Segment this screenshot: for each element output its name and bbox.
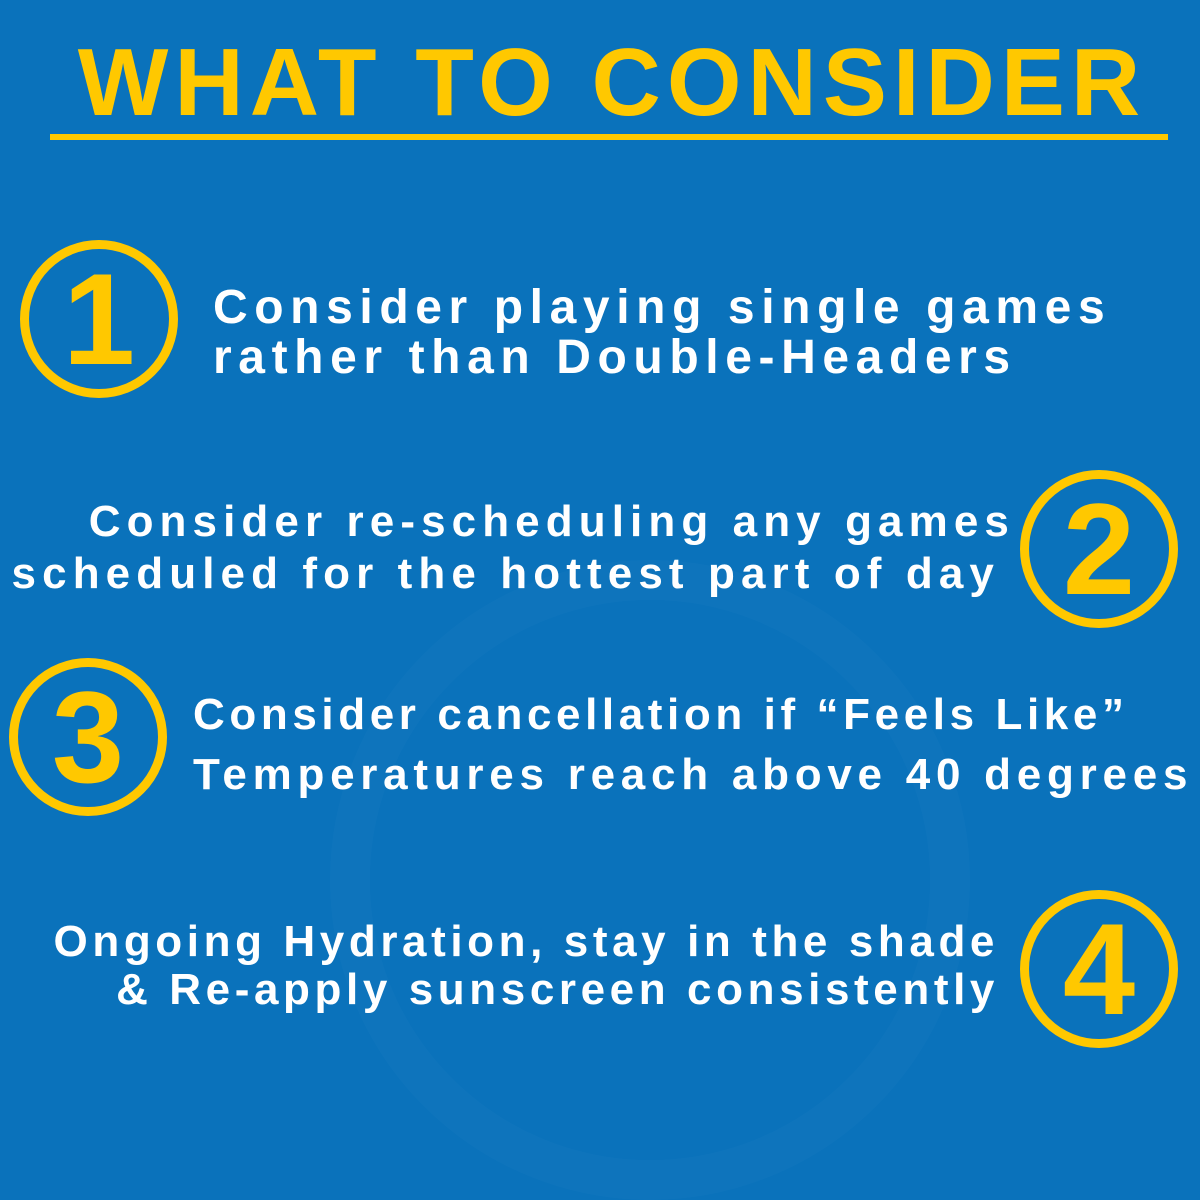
text 4: Ongoing Hydration, stay in the shade: [54, 917, 999, 966]
title: WHAT TO CONSIDER: [78, 29, 1146, 136]
text 1: rather than Double-Headers: [213, 331, 1017, 384]
text 1: Consider playing single games: [213, 281, 1111, 334]
text 3: [193, 690, 1193, 799]
item 2: [12, 470, 1178, 628]
text 4: [54, 917, 999, 1014]
icon: number 1 circle: [20, 240, 178, 398]
title underline: [50, 134, 1168, 140]
item 4: [54, 890, 1178, 1048]
text 3: Temperatures reach above 40 degrees: [193, 750, 1193, 799]
watermark circle: [330, 560, 970, 1200]
icon: number 4 circle: 4: [1063, 896, 1135, 1042]
item 1: [20, 240, 1111, 398]
text 2: scheduled for the hottest part of day: [12, 549, 1000, 598]
icon: number 3 circle: [9, 658, 167, 816]
item 3: [9, 658, 1193, 816]
text 2: Consider re-scheduling any games: [89, 497, 1015, 546]
icon: number 2 circle: 2: [1063, 476, 1135, 622]
text 1: [213, 281, 1111, 384]
text 2: [12, 497, 1015, 598]
text 4: & Re-apply sunscreen consistently: [116, 965, 999, 1014]
icon: number 4 circle: [1020, 890, 1178, 1048]
icon: number 2 circle: [1020, 470, 1178, 628]
icon: number 3 circle: 3: [52, 664, 124, 810]
text 3: Consider cancellation if “Feels Like”: [193, 690, 1129, 739]
icon: number 1 circle: 1: [63, 246, 135, 392]
